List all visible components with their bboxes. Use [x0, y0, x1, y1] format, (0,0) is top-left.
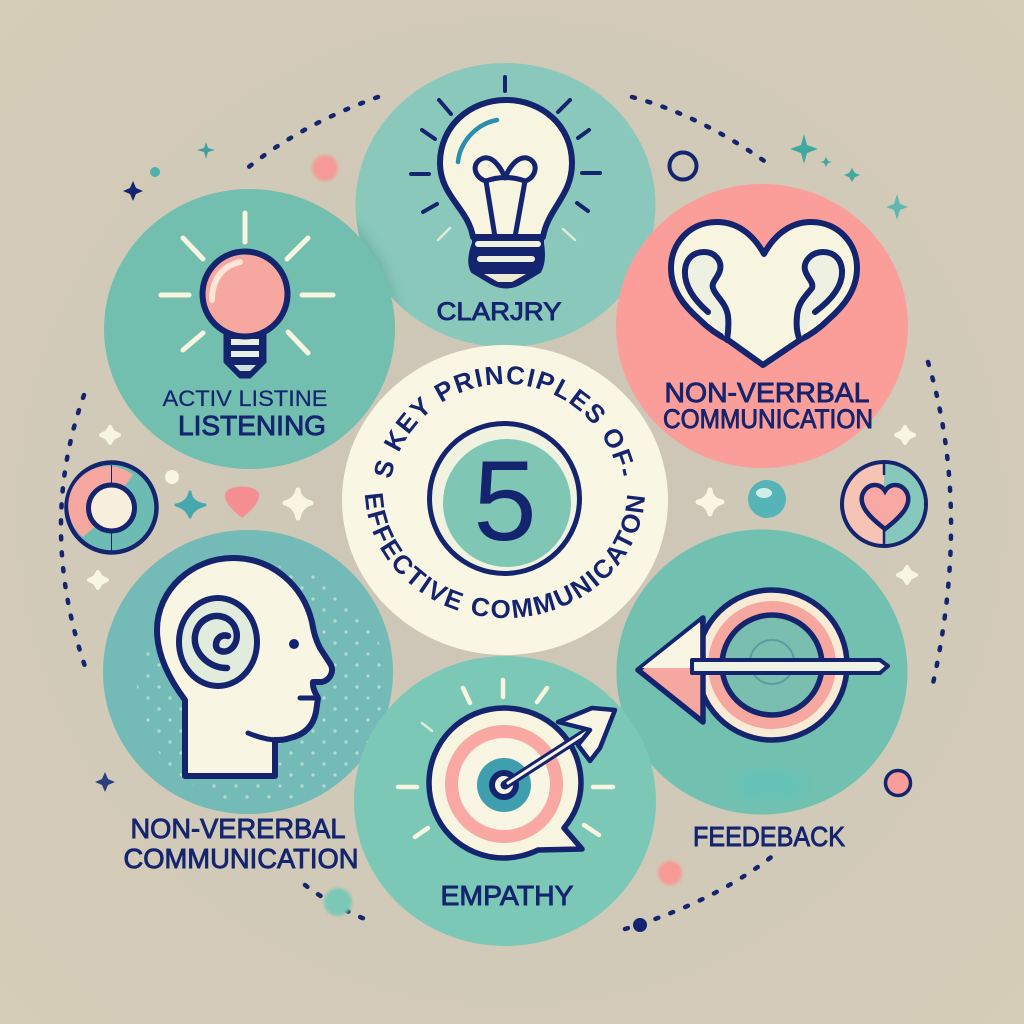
label: non-verbal head: NON-VERERBAL [130, 813, 346, 844]
label: feedback: FEEDEBACK [693, 821, 845, 852]
icon: right heart badge [842, 462, 926, 546]
panel: clarity [356, 63, 656, 346]
title: curved text: S KEY PRINCIPLES OF- [374, 366, 634, 478]
decorative icons [89, 134, 916, 932]
panel: non-verbal head: COMMUNICATION [124, 843, 358, 874]
panel: active listening [104, 189, 395, 469]
label: non-verbal top: NON-VERRBAL [664, 377, 870, 408]
panel: center title [342, 345, 668, 655]
icon: number 5 badge: 5 [473, 438, 537, 565]
panel: non-verbal heart: COMMUNICATION [663, 404, 873, 434]
icon: speech target [398, 680, 615, 858]
panel: empathy [354, 656, 656, 946]
icon: light bulb [411, 77, 600, 288]
panel: non-verbal heart [616, 184, 908, 468]
dotted orbit arcs [61, 97, 951, 929]
label: clarity: CLARJRY [436, 298, 562, 326]
label: active listening: ACTIV LISTINE [162, 386, 328, 411]
icon: heart with ears [671, 222, 857, 365]
panel: active listening: LISTENING [178, 410, 326, 441]
icon: number 5 badge [430, 424, 580, 574]
icon: head with spiral [157, 558, 332, 776]
title: curved text [364, 366, 645, 618]
icon: pink bulb [161, 213, 333, 377]
panel: non-verbal head [103, 530, 393, 874]
panel: feedback [616, 530, 908, 852]
title: curved text: EFFECTIVE COMMUNICATON [364, 493, 645, 618]
icon: target with arrow [638, 590, 888, 740]
icon: left donut [66, 462, 156, 552]
label: empathy: EMPATHY [440, 880, 574, 911]
